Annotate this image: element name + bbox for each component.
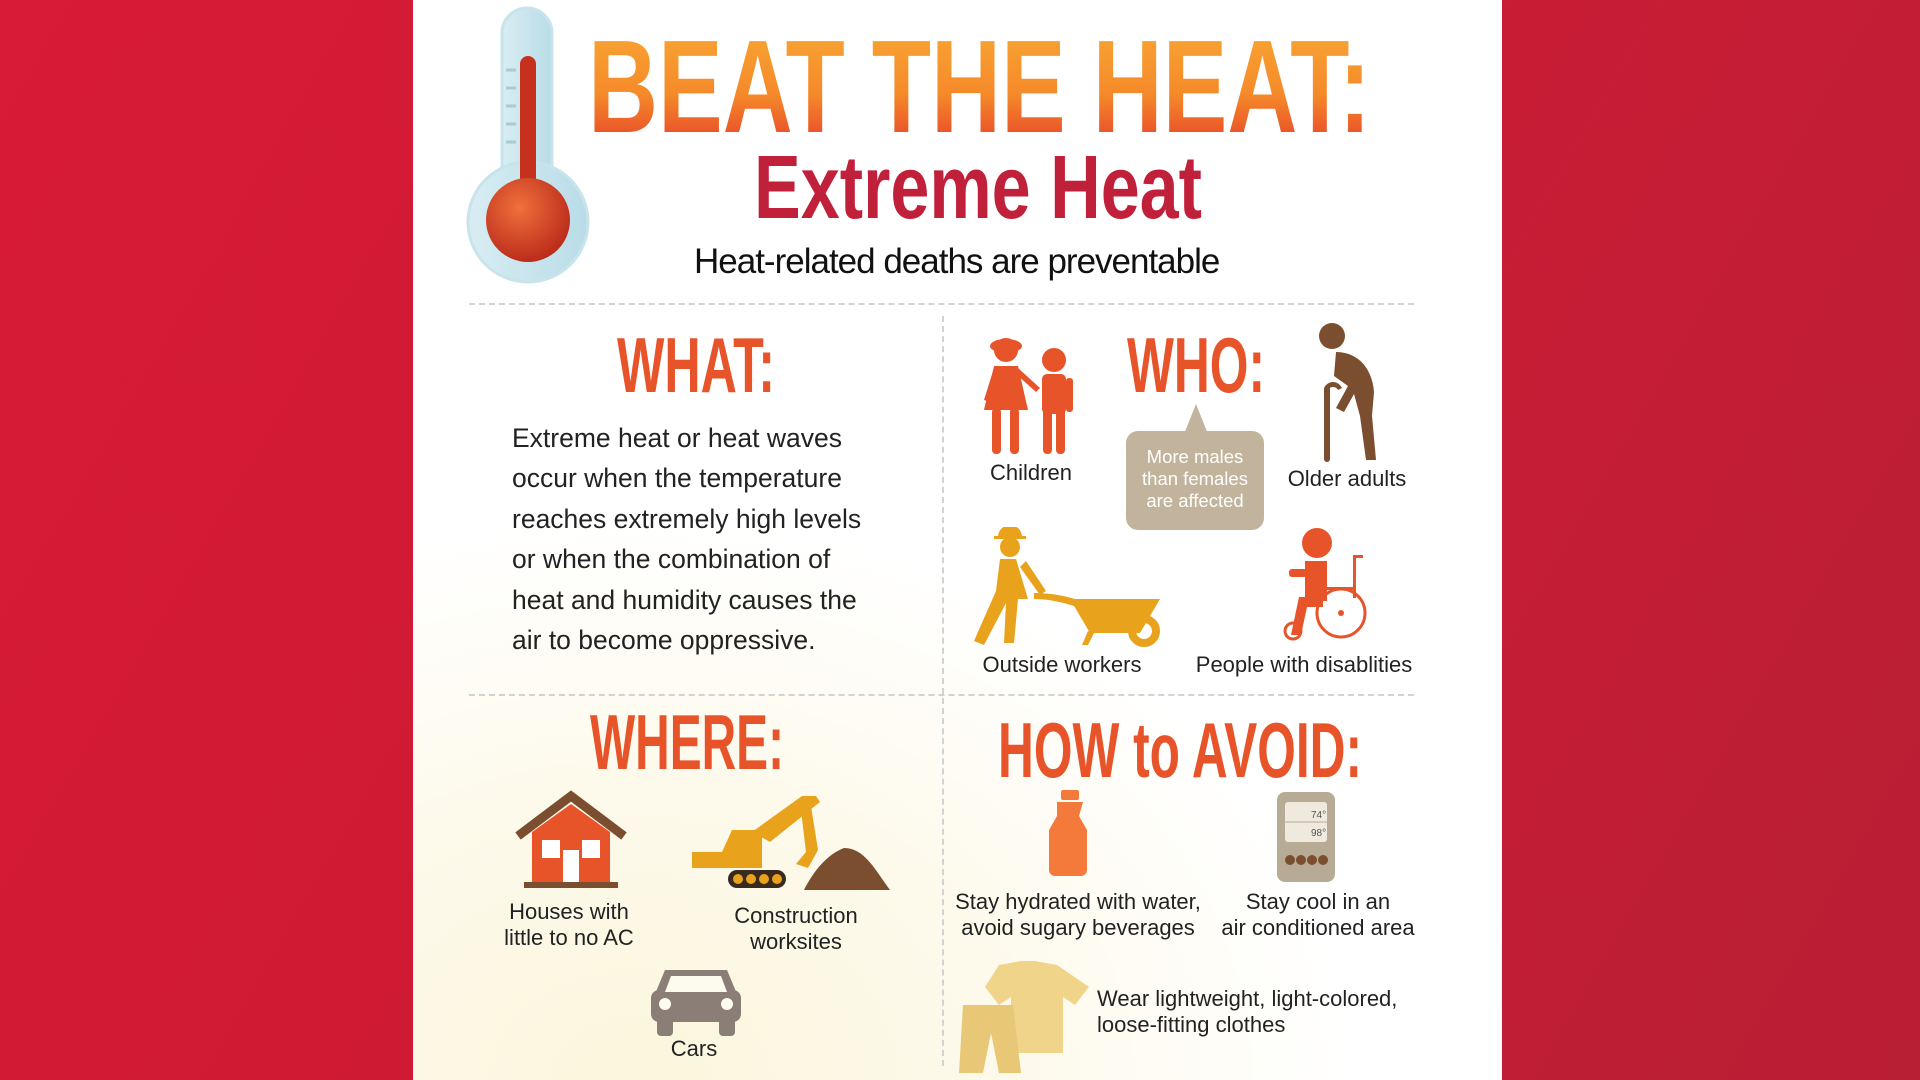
label: stay hydrated [955,889,1201,940]
icon: thermostat: 74° [1311,810,1326,821]
text block: what description: reaches extremely high levels [512,504,861,534]
callout: males vs females [1126,404,1264,530]
panel: main white card [413,0,1502,1080]
icon: construction excavator [692,796,890,890]
label: stay cool: Stay cool in an [1246,889,1390,914]
callout: males vs females: More males [1147,446,1243,467]
text block: wear lightweight: loose-fitting clothes [1097,1012,1285,1037]
callout: males vs females: than females [1142,468,1248,489]
text block: what description: heat and humidity causes the [512,585,857,615]
label: stay cool [1221,889,1415,940]
icon: thermostat [1277,792,1335,882]
label: houses: Houses with [509,899,629,924]
icon: older adult [1319,323,1376,462]
label: construction [734,903,858,954]
callout: males vs females: are affected [1146,490,1244,511]
label: People with disabilities: People with disablities [1196,652,1412,677]
text block: wear lightweight [1097,986,1397,1037]
label: construction: Construction [734,903,858,928]
text block: what description: or when the combination of [512,544,830,574]
label: Older adults: Older adults [1288,466,1406,491]
label: houses: little to no AC [504,925,634,950]
icon: water bottle [1049,790,1087,876]
icon: car [651,970,741,1036]
label: stay cool: air conditioned area [1221,915,1415,940]
label: Outside workers: Outside workers [983,652,1141,677]
label: Cars: Cars [671,1036,717,1061]
label: stay hydrated: avoid sugary beverages [961,915,1195,940]
icon: wheelchair [1284,528,1366,640]
label: stay hydrated: Stay hydrated with water, [955,889,1201,914]
text block: what description [512,423,861,655]
label: construction: worksites [750,929,842,954]
label: houses [504,899,634,950]
icon: outside worker [974,527,1160,647]
tagline: Heat-related deaths are preventable [694,242,1219,281]
icon: house [515,790,627,888]
label: Children: Children [990,460,1072,485]
text block: what description: occur when the temperature [512,463,842,493]
text block: wear lightweight: Wear lightweight, light-colored, [1097,986,1397,1011]
icon: thermostat: 98° [1311,828,1326,839]
text block: what description: Extreme heat or heat waves [512,423,842,453]
icon: clothes [959,961,1089,1073]
icon: children [984,338,1073,454]
dividers [469,303,1414,305]
text block: what description: air to become oppressive. [512,625,815,655]
icon: thermometer [466,6,590,284]
